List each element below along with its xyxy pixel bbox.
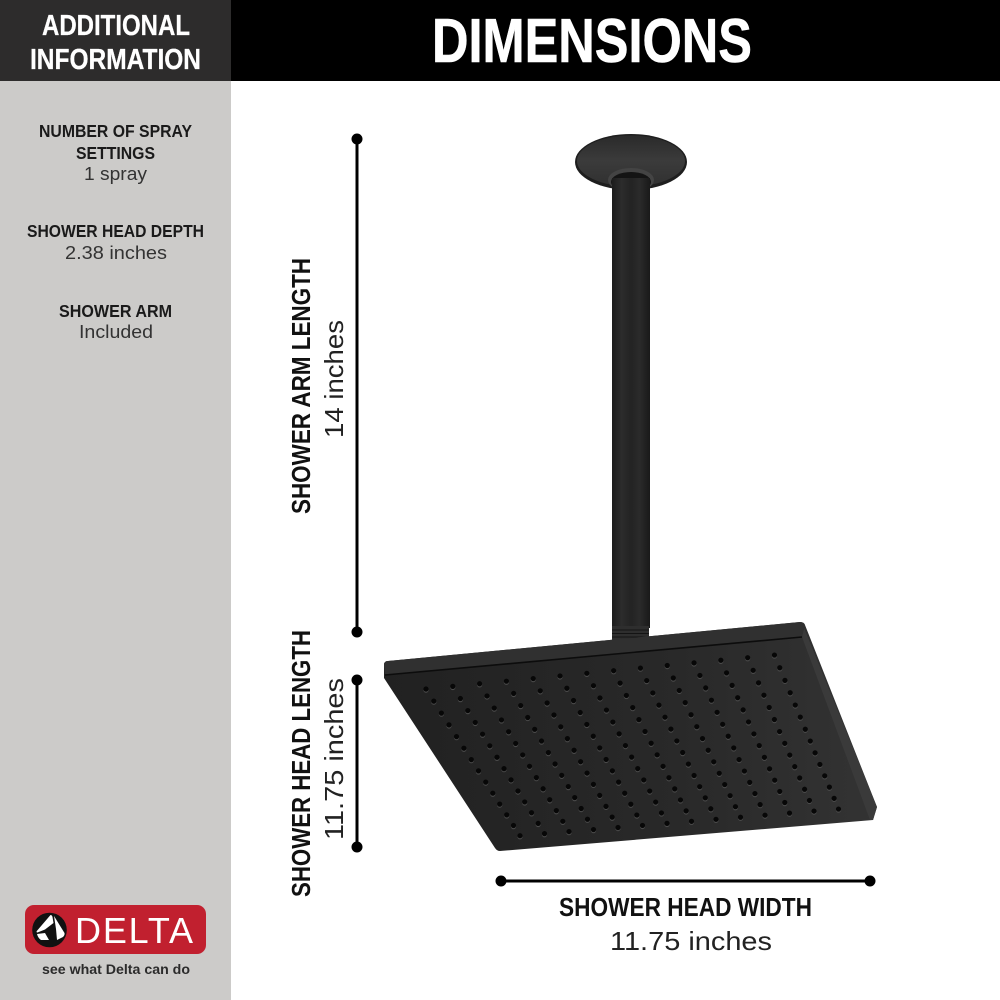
spec: shower head depth: 2.38 inches	[65, 243, 167, 263]
header: dimensions	[231, 0, 1000, 81]
label: shower head length: SHOWER HEAD LENGTH	[286, 630, 316, 897]
label: shower arm length: 14 inches	[319, 320, 349, 438]
logo: Delta: see what Delta can do	[42, 961, 190, 977]
arrow: shower head width	[496, 876, 875, 886]
label: shower head width: 11.75 inches	[610, 926, 772, 956]
spec: shower arm: SHOWER ARM	[59, 301, 172, 321]
label: shower head width	[559, 892, 812, 956]
icon: Delta emblem	[32, 913, 67, 947]
header: dimensions: DIMENSIONS	[432, 7, 752, 76]
arrow: shower arm length	[352, 134, 362, 637]
label: shower head length	[286, 630, 349, 897]
nozzles	[426, 655, 839, 837]
spec: number of spray settings: 1 spray	[84, 164, 147, 184]
spec: number of spray settings: NUMBER OF SPRAY	[39, 121, 192, 141]
arrow: shower head length	[352, 675, 362, 852]
label: shower arm length: SHOWER ARM LENGTH	[286, 258, 316, 514]
shower arm	[612, 178, 650, 628]
spec: shower arm	[59, 301, 172, 342]
header: additional information: INFORMATION	[30, 44, 201, 76]
spec: shower head depth: SHOWER HEAD DEPTH	[27, 221, 204, 241]
spec: number of spray settings	[39, 121, 192, 184]
spec: number of spray settings: SETTINGS	[76, 143, 155, 163]
threaded connector	[612, 626, 649, 642]
logo: Delta: DELTA	[75, 910, 193, 951]
header: additional information: ADDITIONAL	[42, 10, 190, 42]
logo: Delta	[25, 905, 206, 977]
label: shower head width: SHOWER HEAD WIDTH	[559, 892, 812, 922]
spec: shower head depth	[27, 221, 204, 263]
shower head body	[384, 622, 877, 851]
header: additional information	[0, 0, 231, 81]
panel: sidebar	[0, 81, 231, 1000]
illustration: shower head and arm	[384, 134, 877, 851]
spec: shower arm: Included	[79, 322, 153, 342]
label: shower arm length	[286, 258, 349, 514]
label: shower head length: 11.75 inches	[319, 678, 349, 840]
flange	[575, 134, 687, 192]
